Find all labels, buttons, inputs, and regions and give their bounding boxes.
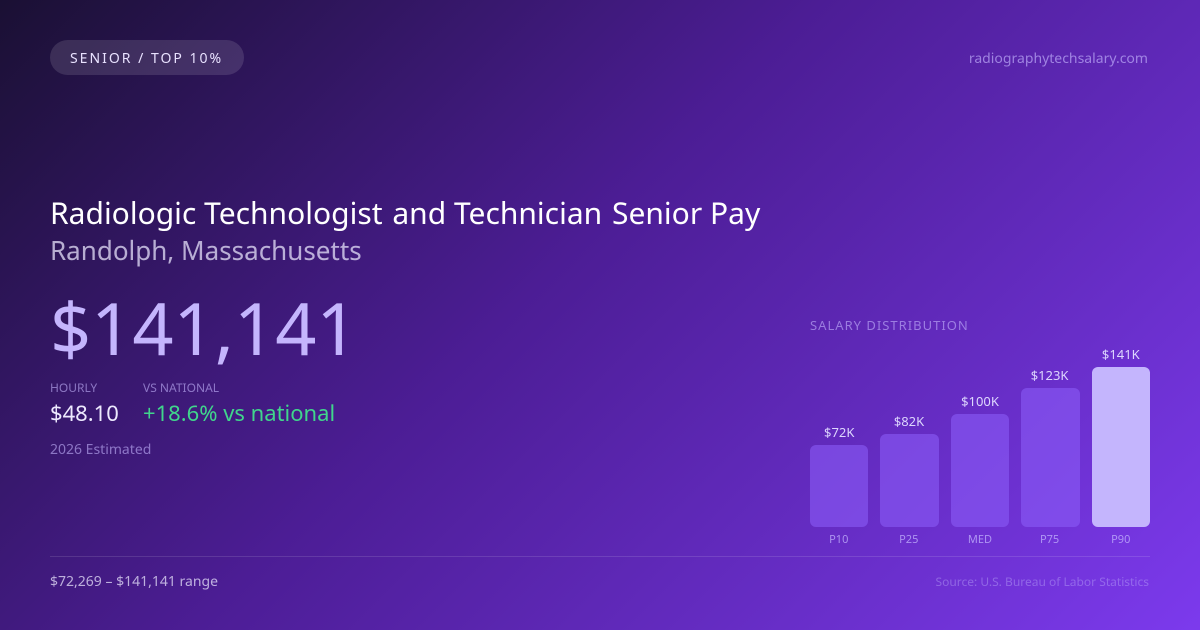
source text: Source: U.S. Bureau of Labor Statistics [936,573,1149,590]
stat: hourly [50,379,119,428]
title: Radiologic Technologist and Technician Senior Pay [50,192,760,233]
bar: P90 [1092,367,1150,527]
bar: P25 [880,434,939,527]
value: P75: $123K [1031,366,1068,384]
vs national label: VS NATIONAL [143,379,219,396]
badge: senior / top 10% [50,40,244,75]
stat: vs national [143,379,335,428]
main salary figure: $141,141 [50,279,358,377]
bar: median [951,414,1009,527]
hourly label: HOURLY [50,379,97,396]
axis label: P25: P25 [899,532,918,547]
hourly value: $48.10 [50,398,119,428]
badge: senior / top 10%: SENIOR / TOP 10% [70,49,223,68]
axis label: P75: P75 [1040,532,1059,547]
bar: P10 [810,445,868,527]
range text: $72,269 – $141,141 range [50,572,218,591]
value: P90: $141K [1102,345,1140,363]
site domain: radiographytechsalary.com [969,49,1148,68]
location subtitle: Randolph, Massachusetts [50,232,362,268]
vs national value: +18.6% vs national [143,398,335,428]
estimate note: 2026 Estimated [50,440,151,459]
axis label: P10: P10 [829,532,848,547]
bar: P75 [1021,388,1080,527]
value: P25: $82K [894,412,924,430]
value: median: $100K [961,392,999,410]
chart heading: SALARY DISTRIBUTION [810,316,969,334]
axis label: median: MED [968,532,992,547]
value: P10: $72K [824,423,854,441]
axis label: P90: P90 [1111,532,1130,547]
